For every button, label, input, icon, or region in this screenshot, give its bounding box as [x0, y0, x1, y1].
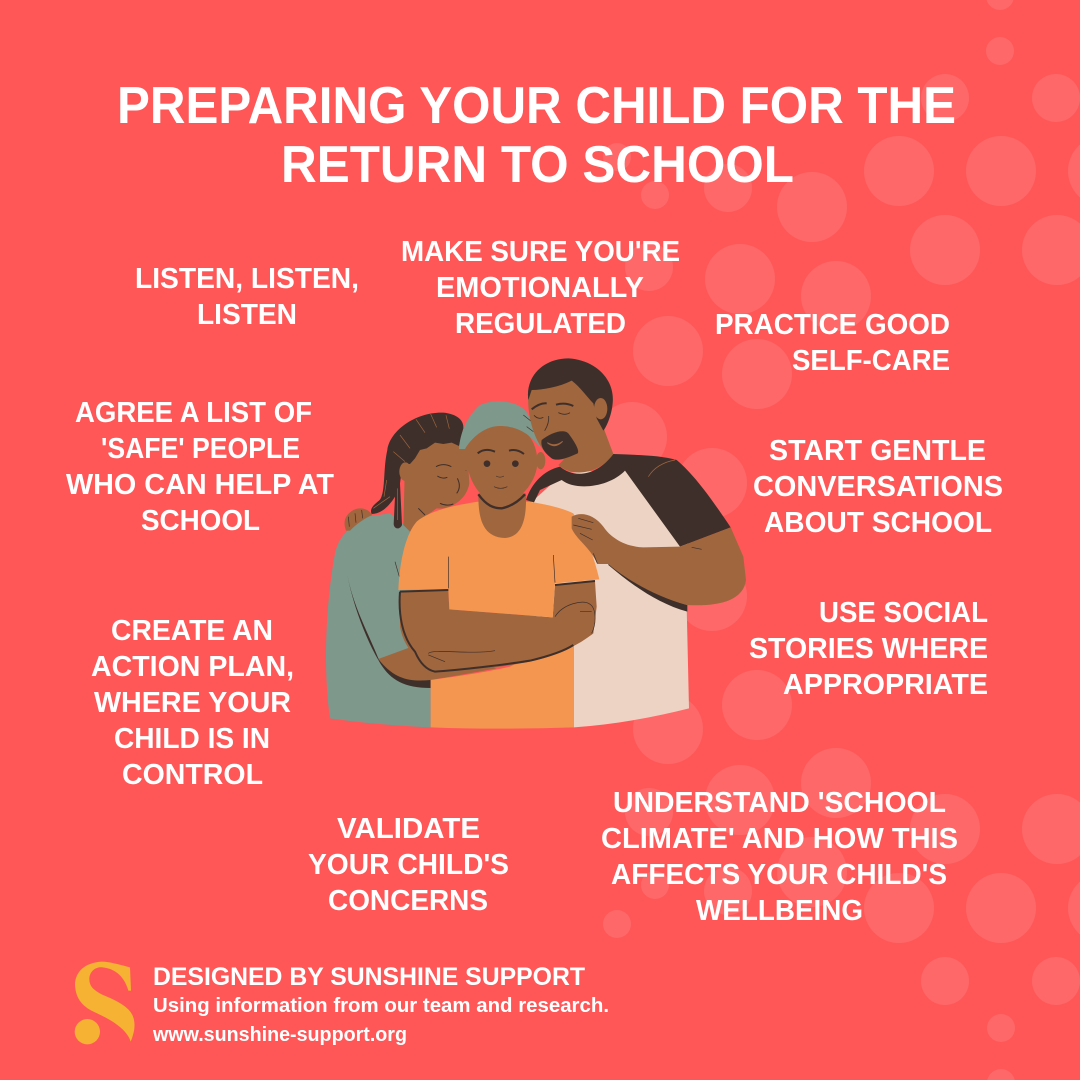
footer credit [152, 963, 609, 1046]
tip: create an action plan: CONTROL [122, 759, 263, 791]
illustration: family hugging [326, 358, 746, 729]
tip: agree a list of safe people: WHO CAN HELP AT [66, 469, 334, 501]
tip: validate your child's concerns: VALIDATE [337, 813, 480, 845]
tip: validate your child's concerns: YOUR CHILD'S [308, 849, 509, 881]
tip: listen, listen, listen: LISTEN [197, 299, 297, 331]
tip: create an action plan: CREATE AN [111, 615, 273, 647]
tip: practice good self-care: SELF-CARE [792, 345, 950, 377]
footer credit: www.sunshine-support.org [152, 1024, 407, 1046]
father arm and hand [572, 460, 746, 612]
tip: understand school climate: AFFECTS YOUR CHILD'S [611, 859, 947, 891]
tip: create an action plan: WHERE YOUR [94, 687, 291, 719]
tip: listen, listen, listen: LISTEN, LISTEN, [135, 263, 359, 295]
title: PREPARING YOUR CHILD FOR THE [117, 77, 956, 135]
tip: agree a list of safe people: SCHOOL [141, 505, 260, 537]
icon: sunshine support S logo [75, 962, 135, 1044]
tip: use social stories: USE SOCIAL [819, 597, 988, 629]
tip: understand school climate [601, 787, 958, 927]
tip: start gentle conversations [753, 435, 1003, 539]
tip: agree a list of safe people: AGREE A LIST OF [75, 397, 312, 429]
tip: start gentle conversations: START GENTLE [769, 435, 986, 467]
tip: agree a list of safe people [66, 397, 334, 537]
father body and shirt [526, 427, 731, 727]
tip: start gentle conversations: CONVERSATIONS [753, 471, 1003, 503]
tip: practice good self-care [715, 309, 950, 377]
mother [326, 413, 497, 727]
tip: make sure you're emotionally regulated: MAKE SURE YOU'RE [401, 236, 680, 268]
title: RETURN TO SCHOOL [281, 136, 794, 194]
footer credit: Using information from our team and research. [153, 995, 609, 1017]
father head [528, 358, 613, 460]
footer credit: DESIGNED BY SUNSHINE SUPPORT [153, 963, 585, 991]
tip: validate your child's concerns [308, 813, 509, 917]
child [398, 401, 599, 729]
tip: use social stories: STORIES WHERE [749, 633, 988, 665]
tip: practice good self-care: PRACTICE GOOD [715, 309, 950, 341]
tip: create an action plan: ACTION PLAN, [91, 651, 294, 683]
tip: make sure you're emotionally regulated: EMOTIONALLY [436, 272, 644, 304]
background bubbles [597, 0, 1080, 1080]
tip: create an action plan [91, 615, 294, 791]
tip: agree a list of safe people: 'SAFE' PEOPLE [101, 433, 300, 465]
title [117, 77, 956, 194]
tip: understand school climate: CLIMATE' AND HOW THIS [601, 823, 958, 855]
tip: make sure you're emotionally regulated [401, 236, 680, 340]
tip: understand school climate: WELLBEING [696, 895, 863, 927]
tip: understand school climate: UNDERSTAND 'SCHOOL [613, 787, 946, 819]
tip: listen, listen, listen [135, 263, 359, 331]
tip: start gentle conversations: ABOUT SCHOOL [764, 507, 992, 539]
tip: validate your child's concerns: CONCERNS [328, 885, 488, 917]
tip: use social stories [749, 597, 988, 701]
tip: make sure you're emotionally regulated: REGULATED [455, 308, 626, 340]
tip: use social stories: APPROPRIATE [783, 669, 988, 701]
tip: create an action plan: CHILD IS IN [114, 723, 270, 755]
